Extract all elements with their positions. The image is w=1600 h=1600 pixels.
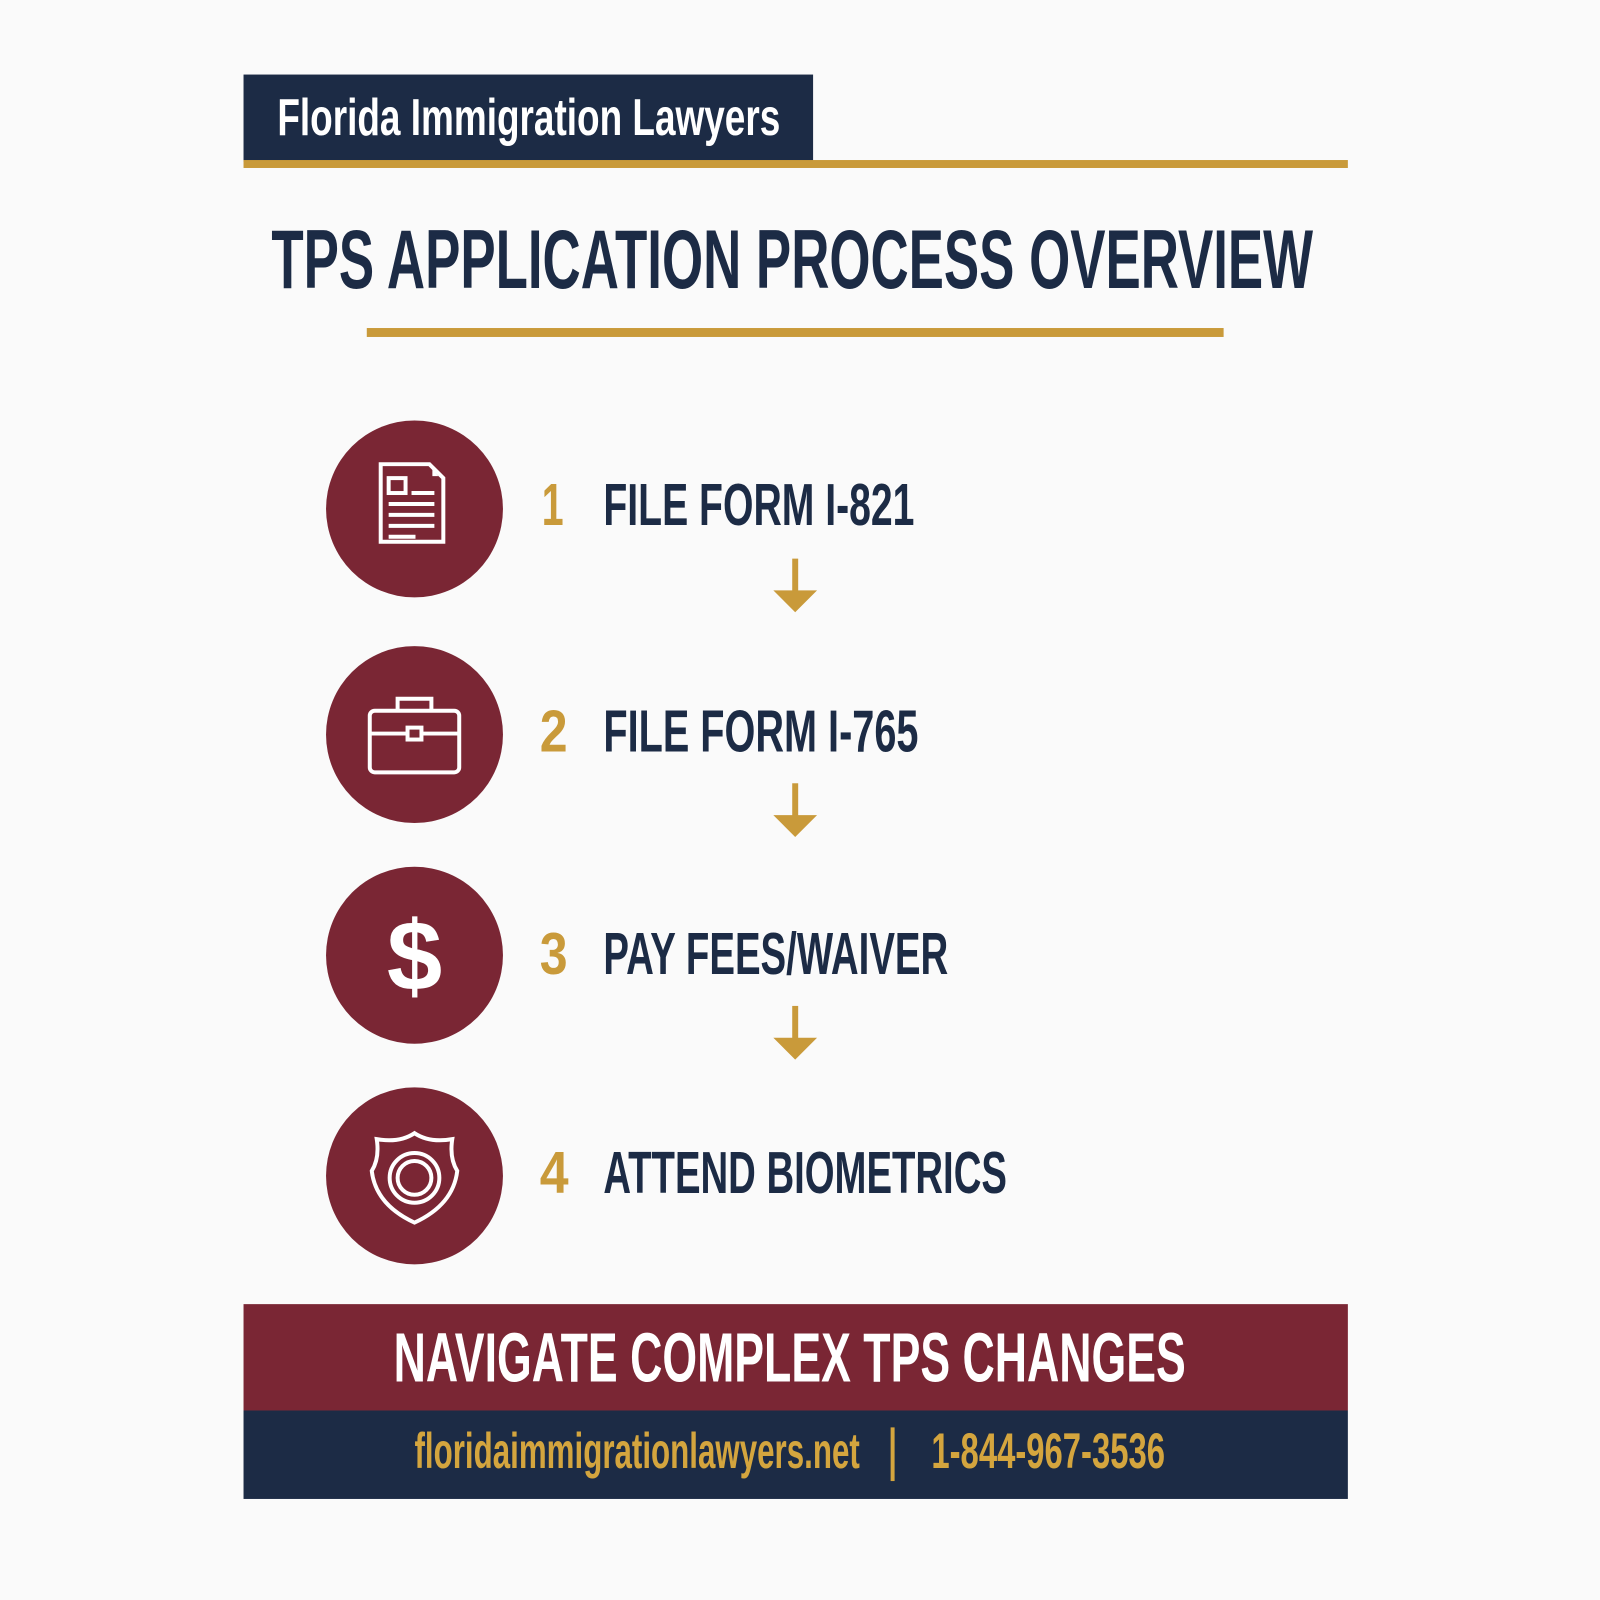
- arrow 3: [773, 1006, 817, 1060]
- step 1: 1: [542, 471, 564, 538]
- step 1: [326, 420, 914, 597]
- step 2: [326, 646, 918, 823]
- step 2: FILE FORM I-765: [603, 697, 918, 764]
- arrow 1: [773, 559, 817, 612]
- step 3: 3: [540, 920, 568, 987]
- icon: briefcase: [326, 646, 503, 823]
- header: firm name box: [244, 75, 813, 162]
- footer contact bar: [244, 1410, 1348, 1499]
- step 3: PAY FEES/WAIVER: [603, 920, 948, 987]
- step 4: 4: [540, 1139, 569, 1206]
- step 2: 2: [540, 697, 568, 764]
- icon: badge: [326, 1087, 503, 1264]
- callout banner: NAVIGATE COMPLEX TPS CHANGES: [394, 1319, 1186, 1397]
- callout banner: [244, 1304, 1348, 1410]
- icon: dollar: $: [387, 901, 442, 1012]
- arrow 2: [773, 783, 817, 837]
- step 4: ATTEND BIOMETRICS: [603, 1139, 1007, 1206]
- step 1: FILE FORM I-821: [603, 471, 914, 538]
- icon: document: [326, 420, 503, 597]
- footer contact bar: 1-844-967-3536: [931, 1423, 1165, 1479]
- header: firm name box: Florida Immigration Lawyers: [277, 88, 780, 146]
- icon: dollar: [326, 867, 503, 1044]
- footer contact bar: floridaimmigrationlawyers.net: [414, 1423, 860, 1479]
- step 4: [326, 1087, 1007, 1264]
- step 3: [326, 867, 948, 1044]
